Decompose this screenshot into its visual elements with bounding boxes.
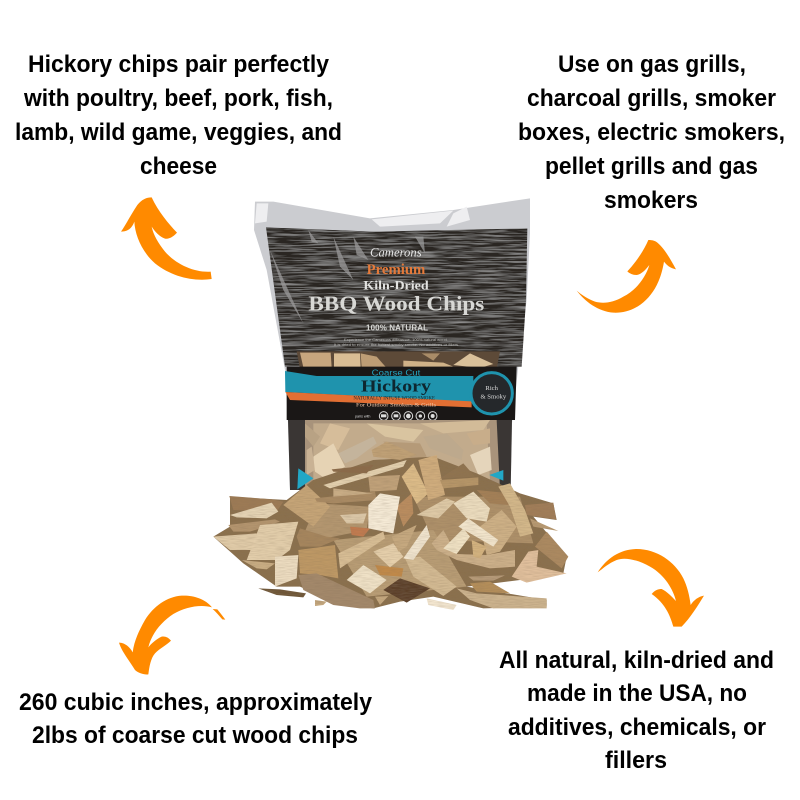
bag: plastic creases — [270, 230, 425, 323]
bag: black band — [287, 367, 517, 420]
bag: rich and smoky badge: Rich — [485, 385, 499, 392]
arrow: upper left — [121, 197, 212, 280]
bag: product name: BBQ Wood Chips — [308, 294, 484, 316]
bag: plastic highlights — [255, 203, 470, 227]
arrow: upper right — [577, 240, 676, 313]
text block: food pairings: lamb, wild game, veggies, and — [15, 119, 342, 146]
bag: plastic body — [254, 198, 530, 490]
bag: hickory label: Hickory — [361, 376, 432, 395]
bag: orange band — [285, 392, 472, 407]
text block: compatible grills: boxes, electric smokers, — [518, 119, 785, 146]
text block: all natural: made in the USA, no — [527, 680, 747, 707]
text block: size and weight — [19, 689, 373, 749]
pile: filler layer — [300, 503, 370, 543]
pile: shadow base — [213, 457, 567, 608]
bag: coarse cut label: Coarse Cut — [372, 368, 421, 378]
text block: all natural: All natural, kiln-dried and — [499, 647, 774, 674]
text block: all natural: fillers — [605, 747, 667, 774]
text block: compatible grills: pellet grills and gas — [545, 153, 758, 180]
bag: teal band — [285, 371, 473, 402]
product photo: wood chip pile — [213, 442, 568, 610]
text block: compatible grills: smokers — [604, 187, 698, 214]
bag: pairs with icons — [355, 412, 437, 420]
bag: dark label — [266, 227, 527, 367]
bag: kiln-dried label: Kiln-Dried — [363, 278, 429, 292]
text block: food pairings — [15, 51, 342, 180]
bag: outdoor smokers label: For Outdoor Smokers & Grills — [356, 403, 436, 409]
bag: fine print — [334, 338, 459, 347]
arrow: lower left — [119, 596, 225, 674]
bag: chips window — [297, 351, 500, 369]
arrow: lower right — [598, 549, 704, 627]
bag: rich and smoky badge — [471, 373, 512, 414]
product photo: bag — [254, 198, 530, 490]
text block: compatible grills: Use on gas grills, — [558, 51, 746, 78]
pile: filler layer right — [413, 497, 533, 543]
bag: fine print: Experience the Camerons difference. 100% natural wood. — [344, 338, 448, 342]
pile: filler layer centre — [333, 530, 467, 597]
text block: all natural: additives, chemicals, or — [508, 714, 766, 741]
text block: all natural — [499, 647, 774, 774]
text block: food pairings: with poultry, beef, pork, fish, — [23, 85, 333, 112]
pile: individual chips — [213, 442, 568, 610]
bag: brand name: Camerons — [370, 246, 422, 260]
text block: compatible grills: charcoal grills, smoker — [527, 85, 776, 112]
bag: premium label: Premium — [367, 262, 425, 278]
bag: natural label: 100% NATURAL — [366, 324, 428, 333]
text block: size and weight: 260 cubic inches, approximately — [19, 689, 373, 716]
bag: rich and smoky badge: & Smoky — [480, 394, 507, 401]
text block: food pairings: cheese — [140, 153, 217, 180]
pile: wood layers — [213, 442, 568, 610]
text block: food pairings: Hickory chips pair perfectly — [28, 51, 330, 78]
bag: pairs with icons: pairs with — [355, 415, 370, 419]
text block: size and weight: 2lbs of coarse cut wood chips — [32, 722, 358, 749]
bag: teal corners — [297, 468, 313, 489]
text block: compatible grills — [518, 51, 785, 214]
bag: lower contents — [288, 420, 512, 490]
bag: fine print: It is dried to ensure the hottest smoky smoke. No additives or fillers. — [334, 343, 459, 347]
bag: tagline: NATURALLY INFUSE WOOD SMOKE — [353, 396, 435, 401]
